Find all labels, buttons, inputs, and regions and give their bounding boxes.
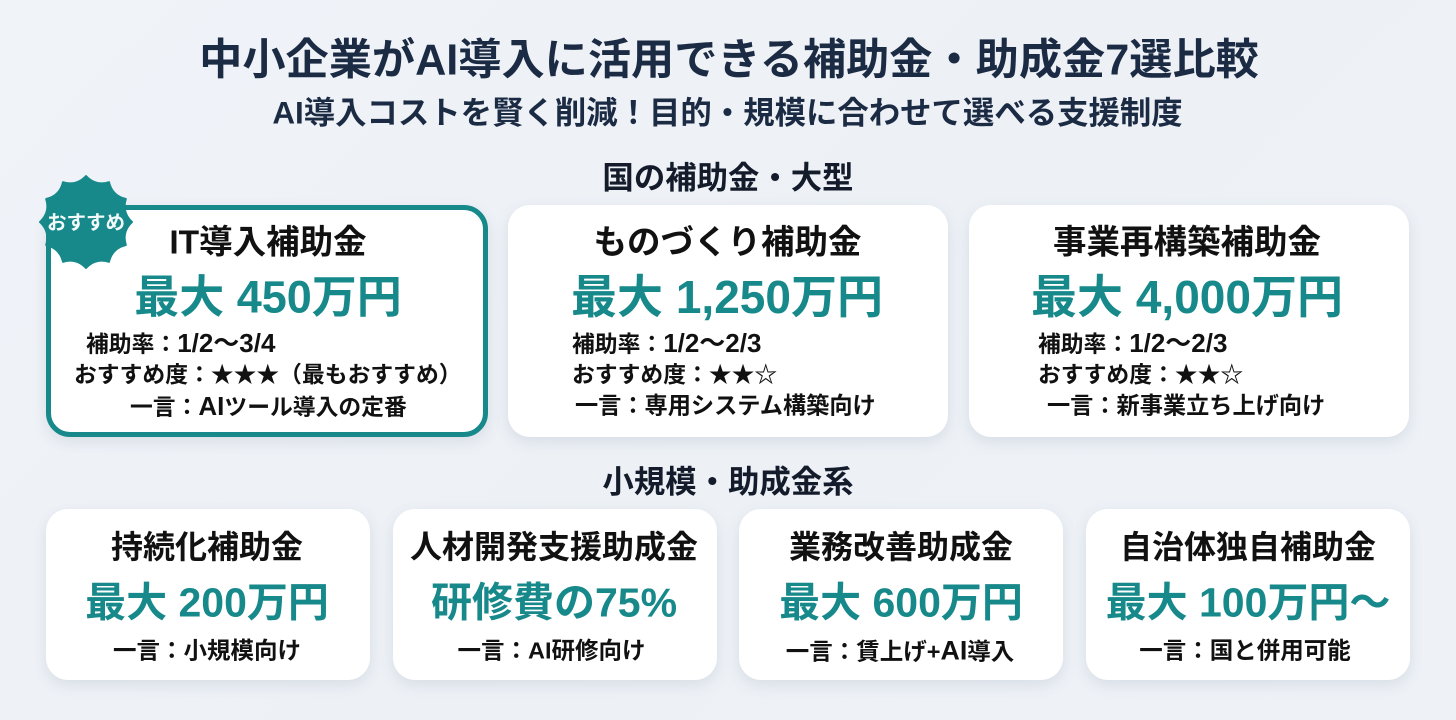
detail: comment: 一言：新事業立ち上げ向け xyxy=(1047,392,1325,418)
card title: 事業再構築補助金 xyxy=(1053,224,1321,261)
amount: 最大 4,000万円 xyxy=(1031,271,1343,323)
icon: recommended badge: おすすめ xyxy=(47,212,125,234)
panel: 業務改善助成金 xyxy=(739,509,1063,680)
detail: subsidy rate: 補助率：1/2〜2/3 xyxy=(572,328,761,358)
card title: 自治体独自補助金 xyxy=(1120,529,1376,565)
panel: 事業再構築補助金 xyxy=(969,205,1409,437)
amount: 研修費の75% xyxy=(431,580,677,626)
card title: ものづくり補助金 xyxy=(594,224,862,261)
amount: 最大 200万円 xyxy=(85,580,329,626)
title: 中小企業がAI導入に活用できる補助金・助成金7選比較 xyxy=(199,36,1259,84)
icon: recommended badge xyxy=(39,175,133,269)
panel: ものづくり補助金 xyxy=(508,205,948,437)
detail: comment: 一言：AIツール導入の定番 xyxy=(130,391,407,421)
section heading: national large subsidies: 国の補助金・大型 xyxy=(602,160,854,195)
panel: IT導入補助金 xyxy=(46,205,488,437)
panel: 人材開発支援助成金 xyxy=(393,509,717,680)
detail: comment: 一言：専用システム構築向け xyxy=(575,392,876,418)
comment: 一言：AI研修向け xyxy=(458,637,646,663)
section heading: small-scale and grants: 小規模・助成金系 xyxy=(602,464,854,499)
amount: 最大 450万円 xyxy=(134,272,402,322)
comment: 一言：国と併用可能 xyxy=(1139,637,1351,663)
panel: 自治体独自補助金 xyxy=(1086,509,1410,680)
comment: 一言：小規模向け xyxy=(113,637,301,663)
card title: 持続化補助金 xyxy=(111,529,303,565)
amount: 最大 600万円 xyxy=(779,580,1023,626)
panel: 持続化補助金 xyxy=(46,509,370,680)
comment: 一言：賃上げ+AI導入 xyxy=(786,636,1014,666)
detail: recommendation: おすすめ度：★★☆ xyxy=(1038,362,1243,388)
card title: IT導入補助金 xyxy=(169,224,367,261)
detail: subsidy rate: 補助率：1/2〜3/4 xyxy=(86,328,275,358)
card title: 業務改善助成金 xyxy=(789,529,1013,565)
amount: 最大 1,250万円 xyxy=(571,271,883,323)
detail: recommendation: おすすめ度：★★★（最もおすすめ） xyxy=(74,362,462,388)
card title: 人材開発支援助成金 xyxy=(410,529,698,565)
detail: recommendation: おすすめ度：★★☆ xyxy=(572,362,777,388)
subtitle: AI導入コストを賢く削減！目的・規模に合わせて選べる支援制度 xyxy=(272,95,1183,130)
detail: subsidy rate: 補助率：1/2〜2/3 xyxy=(1038,328,1227,358)
amount: 最大 100万円〜 xyxy=(1106,580,1390,626)
